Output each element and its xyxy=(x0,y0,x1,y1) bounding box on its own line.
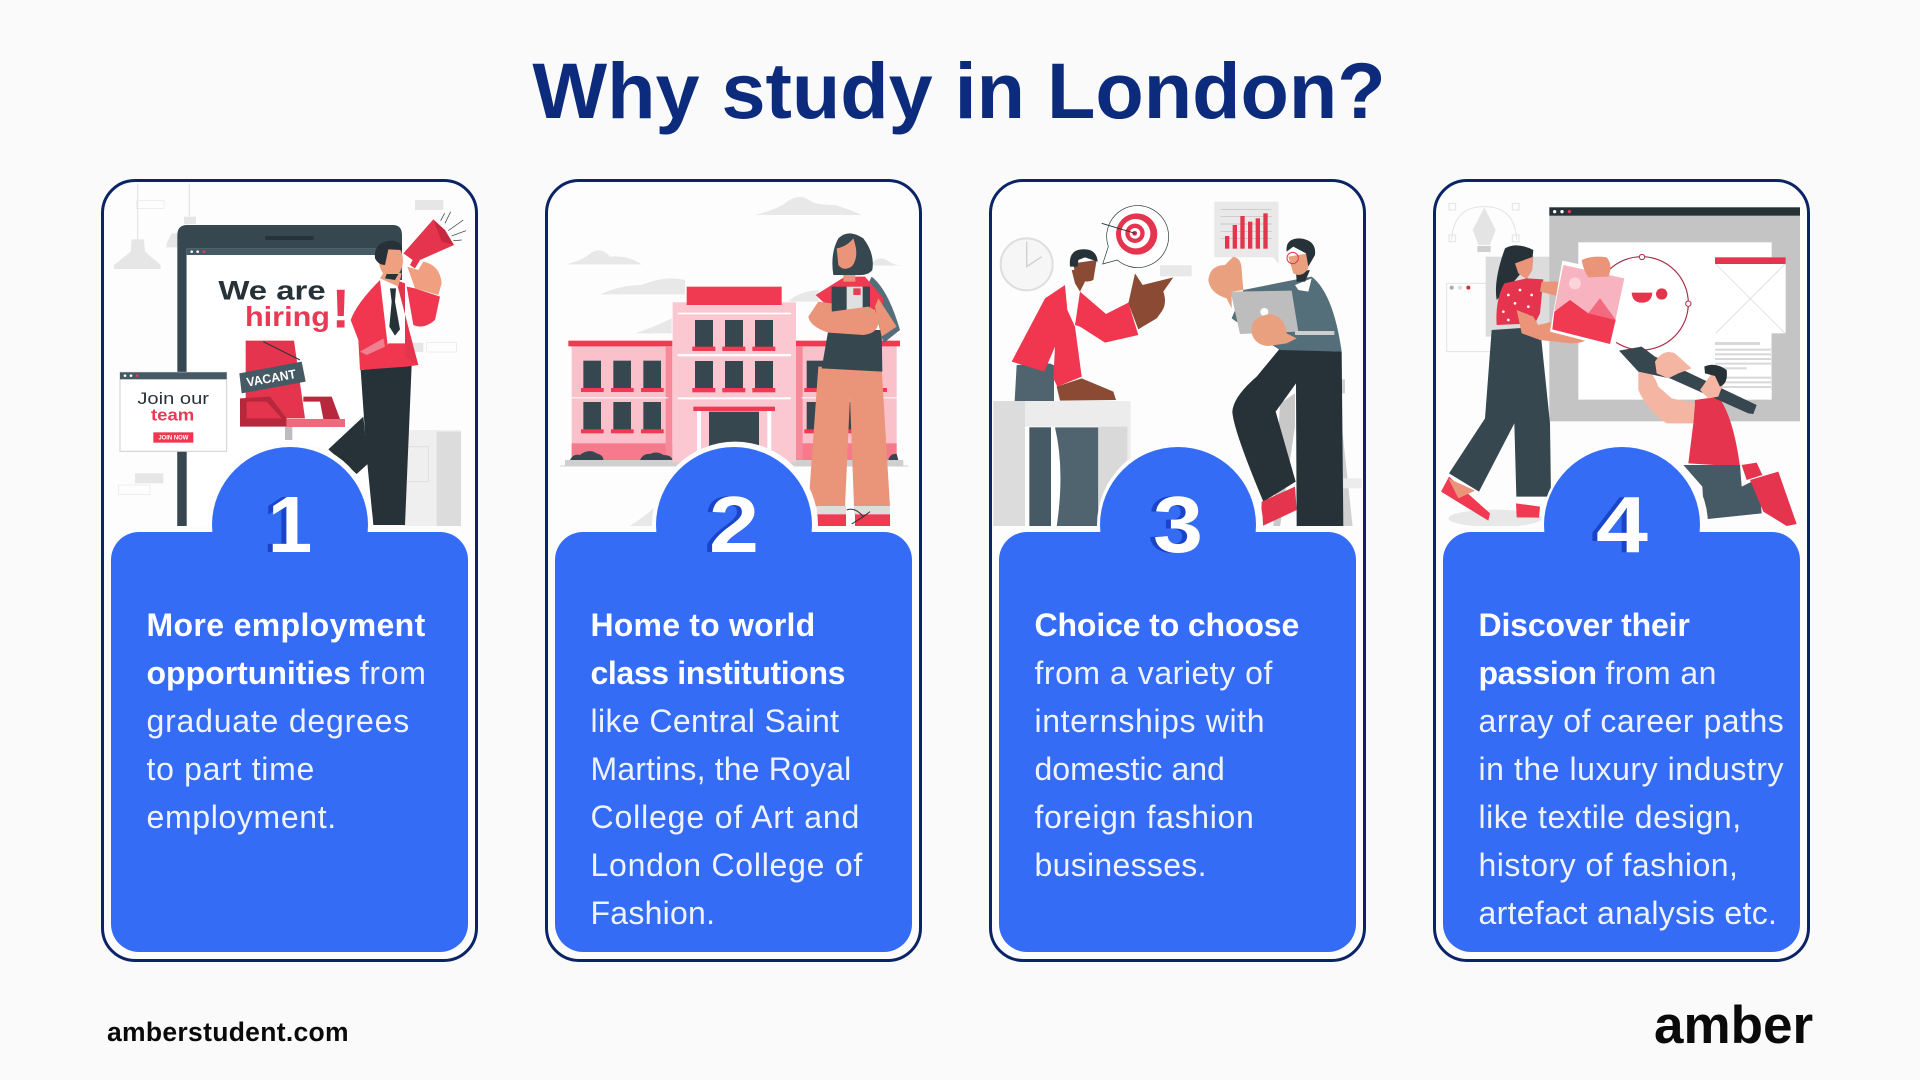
text panel 4: like textile design, xyxy=(1478,798,1742,834)
woman xyxy=(1495,245,1533,299)
number badge 2 xyxy=(656,447,812,568)
illustration: we are hiring: hiring xyxy=(245,300,329,331)
text panel 3: internships with xyxy=(1034,702,1265,738)
text panel 4: history of fashion, xyxy=(1478,846,1738,882)
text panel 3: from a variety of xyxy=(1034,654,1273,690)
text panel 4 xyxy=(1442,532,1800,952)
panel: card 2 institutions xyxy=(544,179,922,962)
student xyxy=(868,276,899,343)
photo xyxy=(1550,260,1628,348)
text panel 3 xyxy=(998,532,1356,952)
website url: amberstudent.com xyxy=(107,1017,349,1047)
text panel 1: opportunities from xyxy=(146,654,427,690)
text panel 3: Choice to choose xyxy=(1034,606,1299,642)
number badge 4: 4 xyxy=(1596,480,1648,568)
desk xyxy=(993,400,1130,527)
number badge 4: 4 xyxy=(1590,480,1643,568)
text panel 4: in the luxury industry xyxy=(1478,750,1784,786)
text panel 1: graduate degrees xyxy=(146,702,410,738)
illustration: we are hiring: Join our xyxy=(137,388,209,407)
person xyxy=(328,416,368,473)
text panel 1: to part time xyxy=(146,750,315,786)
number badge 3: 3 xyxy=(1152,480,1202,568)
right man xyxy=(1338,379,1352,526)
number badge 2: 2 xyxy=(704,480,754,568)
text panel 2: College of Art and xyxy=(590,798,860,834)
text panel 2: like Central Saint xyxy=(590,702,839,738)
text panel 4: passion from an xyxy=(1478,654,1717,690)
number badge 1: 1 xyxy=(262,480,307,568)
left man xyxy=(1046,283,1080,376)
text panel 3: businesses. xyxy=(1034,846,1207,882)
illustration: university building and student xyxy=(560,197,908,526)
illustration: we are hiring: VACANT xyxy=(245,367,297,389)
number badge 3 xyxy=(1100,447,1256,568)
brand logo: amber xyxy=(1654,996,1813,1054)
illustration: we are hiring: JOIN NOW xyxy=(158,434,188,441)
man xyxy=(1688,396,1739,466)
number badge 1: 1 xyxy=(267,480,312,568)
text panel 1 xyxy=(110,532,468,952)
panel: card 1 employment xyxy=(100,179,478,962)
illustration: we are hiring: We are xyxy=(218,275,325,305)
illustration: we are hiring: ! xyxy=(331,277,349,339)
panel: card 3 internships xyxy=(988,179,1366,962)
illustration: two colleagues talking xyxy=(993,202,1362,526)
text panel 2: Home to world xyxy=(590,606,815,642)
text panel 2: class institutions xyxy=(590,654,845,690)
text panel 2: Martins, the Royal xyxy=(590,750,851,786)
text panel 2: Fashion. xyxy=(590,894,715,930)
number badge 1 xyxy=(212,447,368,568)
text panel 2 xyxy=(554,532,912,952)
number badge 3: 3 xyxy=(1148,480,1198,568)
illustration: designers with image and stylus xyxy=(1441,202,1800,526)
number badge 4 xyxy=(1544,447,1700,568)
number badge 2: 2 xyxy=(708,480,758,568)
text panel 1: More employment xyxy=(146,606,426,642)
text panel 3: domestic and xyxy=(1034,750,1225,786)
text panel 1: employment. xyxy=(146,798,337,834)
illustration: we are hiring: team xyxy=(151,405,194,424)
text panel 4: array of career paths xyxy=(1478,702,1784,738)
illustration: we are hiring xyxy=(114,184,466,526)
title: Why study in London? xyxy=(532,46,1386,135)
text panel 4: artefact analysis etc. xyxy=(1478,894,1777,930)
text panel 3: foreign fashion xyxy=(1034,798,1254,834)
text panel 2: London College of xyxy=(590,846,863,882)
panel: card 4 passion xyxy=(1432,179,1810,962)
text panel 4: Discover their xyxy=(1478,606,1690,642)
